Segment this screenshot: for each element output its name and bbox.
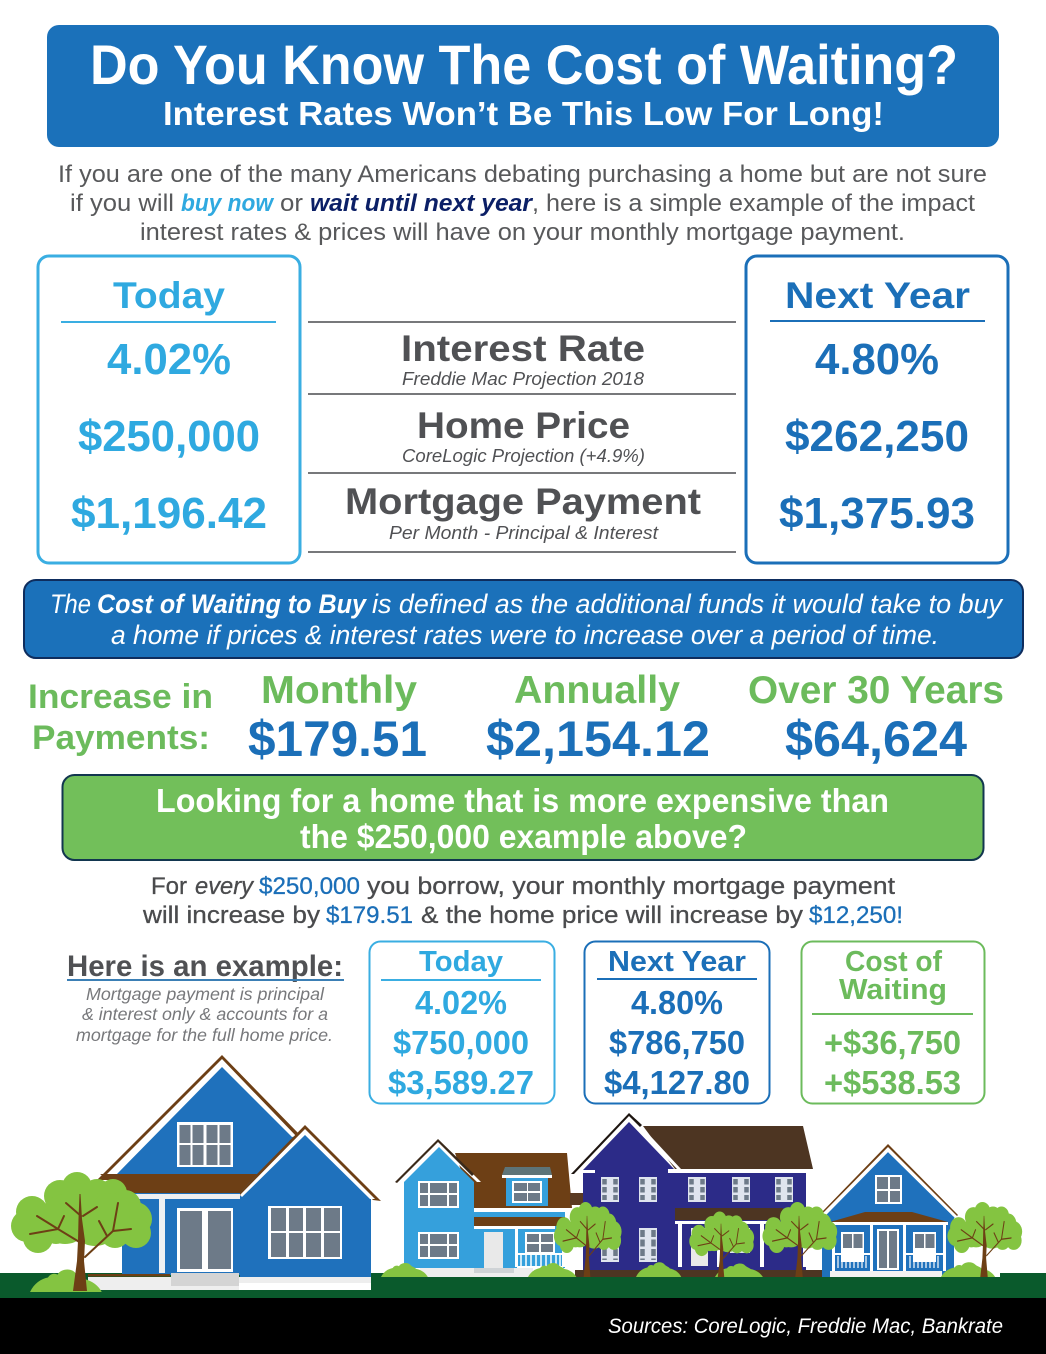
example box: cost of waiting: Cost of	[845, 946, 942, 978]
example box: today	[370, 942, 554, 1104]
panel: next year: Next Year	[785, 275, 970, 316]
example box: next year: 4.80%	[631, 984, 723, 1021]
footer sources	[0, 1298, 1046, 1354]
tree left	[11, 1172, 152, 1291]
tree middle a	[554, 1202, 622, 1277]
panel: next year: $1,375.93	[779, 489, 975, 538]
example heading and note: Mortgage payment is principal	[86, 984, 325, 1004]
intro paragraph: if you will	[70, 190, 174, 217]
example heading and note: mortgage for the full home price.	[76, 1025, 333, 1045]
tree middle b	[689, 1212, 754, 1277]
dormer	[502, 1167, 552, 1206]
example box: today: $750,000	[393, 1024, 529, 1061]
illustration: small blue house	[822, 1144, 958, 1277]
borrowing explanation: $12,250!	[809, 902, 903, 929]
illustration: large blue house	[88, 1055, 381, 1290]
main title: Do You Know The Cost of Waiting?	[90, 33, 958, 96]
stat: over 30 years: Over 30 Years	[748, 669, 1004, 712]
borrowing explanation	[142, 873, 903, 929]
example box: next year: $786,750	[609, 1024, 745, 1061]
panel: today: 4.02%	[107, 335, 231, 384]
intro paragraph: wait until next year	[310, 190, 533, 217]
stat: annually: Annually	[514, 669, 680, 712]
green callout	[62, 775, 984, 860]
intro paragraph: , here is a simple example of the impact	[532, 190, 975, 217]
house window right	[268, 1206, 342, 1259]
footer sources: Sources: CoreLogic, Freddie Mac, Bankrate	[608, 1315, 1003, 1338]
borrowing explanation: $179.51	[326, 902, 413, 929]
stat: monthly: Monthly	[261, 669, 417, 712]
green callout: the $250,000 example above?	[300, 818, 747, 855]
example heading and note: & interest only & accounts for a	[82, 1004, 328, 1024]
navy house upper windows	[601, 1177, 793, 1202]
house door	[177, 1208, 233, 1272]
stat: monthly: $179.51	[248, 711, 427, 767]
panel: today	[38, 256, 300, 563]
intro paragraph: If you are one of the many Americans debating purchasing a home but are not sure	[58, 161, 987, 188]
navy house porch	[675, 1208, 806, 1267]
stat: over 30 years	[748, 669, 1004, 767]
stat: over 30 years: $64,624	[785, 711, 967, 767]
example box: today: Today	[419, 946, 503, 978]
illustration: navy house	[570, 1113, 825, 1277]
ground	[0, 1273, 1046, 1298]
subtitle: Interest Rates Won’t Be This Low For Long!	[163, 95, 884, 132]
example box: next year: $4,127.80	[604, 1064, 750, 1101]
panel: today: $250,000	[78, 412, 260, 461]
panel: next year: $262,250	[785, 412, 969, 461]
intro paragraph: or	[280, 190, 303, 217]
panel: row labels: Interest Rate	[401, 328, 645, 369]
tree right	[947, 1202, 1022, 1277]
definition banner	[24, 580, 1023, 658]
panel: row labels: Mortgage Payment	[345, 481, 701, 522]
panel: row labels	[308, 321, 736, 553]
stat: annually: $2,154.12	[486, 711, 710, 767]
stat: monthly	[248, 669, 427, 767]
borrowing explanation: will increase by	[142, 902, 320, 929]
increase in payments label: Payments:	[32, 719, 210, 757]
borrowing explanation: For	[151, 873, 187, 900]
example box: today: 4.02%	[415, 984, 507, 1021]
bushes	[30, 1262, 995, 1292]
increase in payments label	[28, 678, 213, 757]
borrowing explanation: you borrow, your monthly mortgage payment	[367, 873, 895, 900]
example box: today: $3,589.27	[388, 1064, 534, 1101]
panel: next year	[746, 256, 1008, 563]
definition banner: is defined as the additional funds it would take to buy	[372, 589, 1004, 619]
title banner	[47, 25, 999, 147]
intro paragraph: buy now	[181, 190, 275, 217]
panel: row labels: Per Month - Principal & Interest	[389, 522, 659, 543]
borrowing explanation: $250,000	[259, 873, 360, 900]
definition banner: a home if prices & interest rates were to increase over a period of time.	[111, 620, 939, 650]
illustration: light blue house	[395, 1139, 572, 1277]
house window upper	[177, 1122, 233, 1167]
example box: cost of waiting: Waiting	[839, 974, 947, 1006]
increase in payments label: Increase in	[28, 678, 213, 716]
panel: row labels: Freddie Mac Projection 2018	[402, 368, 645, 389]
example box: next year	[584, 942, 770, 1104]
green callout: Looking for a home that is more expensive than	[156, 782, 889, 819]
borrowing explanation: every	[195, 873, 255, 900]
intro paragraph	[58, 161, 987, 246]
tree middle c	[762, 1202, 837, 1277]
panel: today: $1,196.42	[71, 489, 267, 538]
example box: cost of waiting	[802, 942, 984, 1104]
panel: row labels: CoreLogic Projection (+4.9%)	[402, 445, 645, 466]
porch railing	[515, 1229, 565, 1268]
panel: next year: 4.80%	[815, 335, 939, 384]
panel: today: Today	[113, 275, 225, 316]
intro paragraph: interest rates & prices will have on your monthly mortgage payment.	[140, 219, 905, 246]
definition banner: The	[50, 589, 91, 619]
borrowing explanation: & the home price will increase by	[421, 902, 803, 929]
example box: cost of waiting: +$538.53	[824, 1064, 961, 1101]
navy house lower windows	[601, 1228, 657, 1262]
panel: row labels: Home Price	[417, 405, 630, 446]
stat: annually	[486, 669, 710, 767]
example heading and note: Here is an example:	[67, 950, 343, 983]
definition banner: Cost of Waiting to Buy	[97, 589, 367, 619]
example heading and note	[67, 950, 344, 1045]
example box: cost of waiting: +$36,750	[824, 1024, 961, 1061]
example box: next year: Next Year	[608, 946, 746, 978]
